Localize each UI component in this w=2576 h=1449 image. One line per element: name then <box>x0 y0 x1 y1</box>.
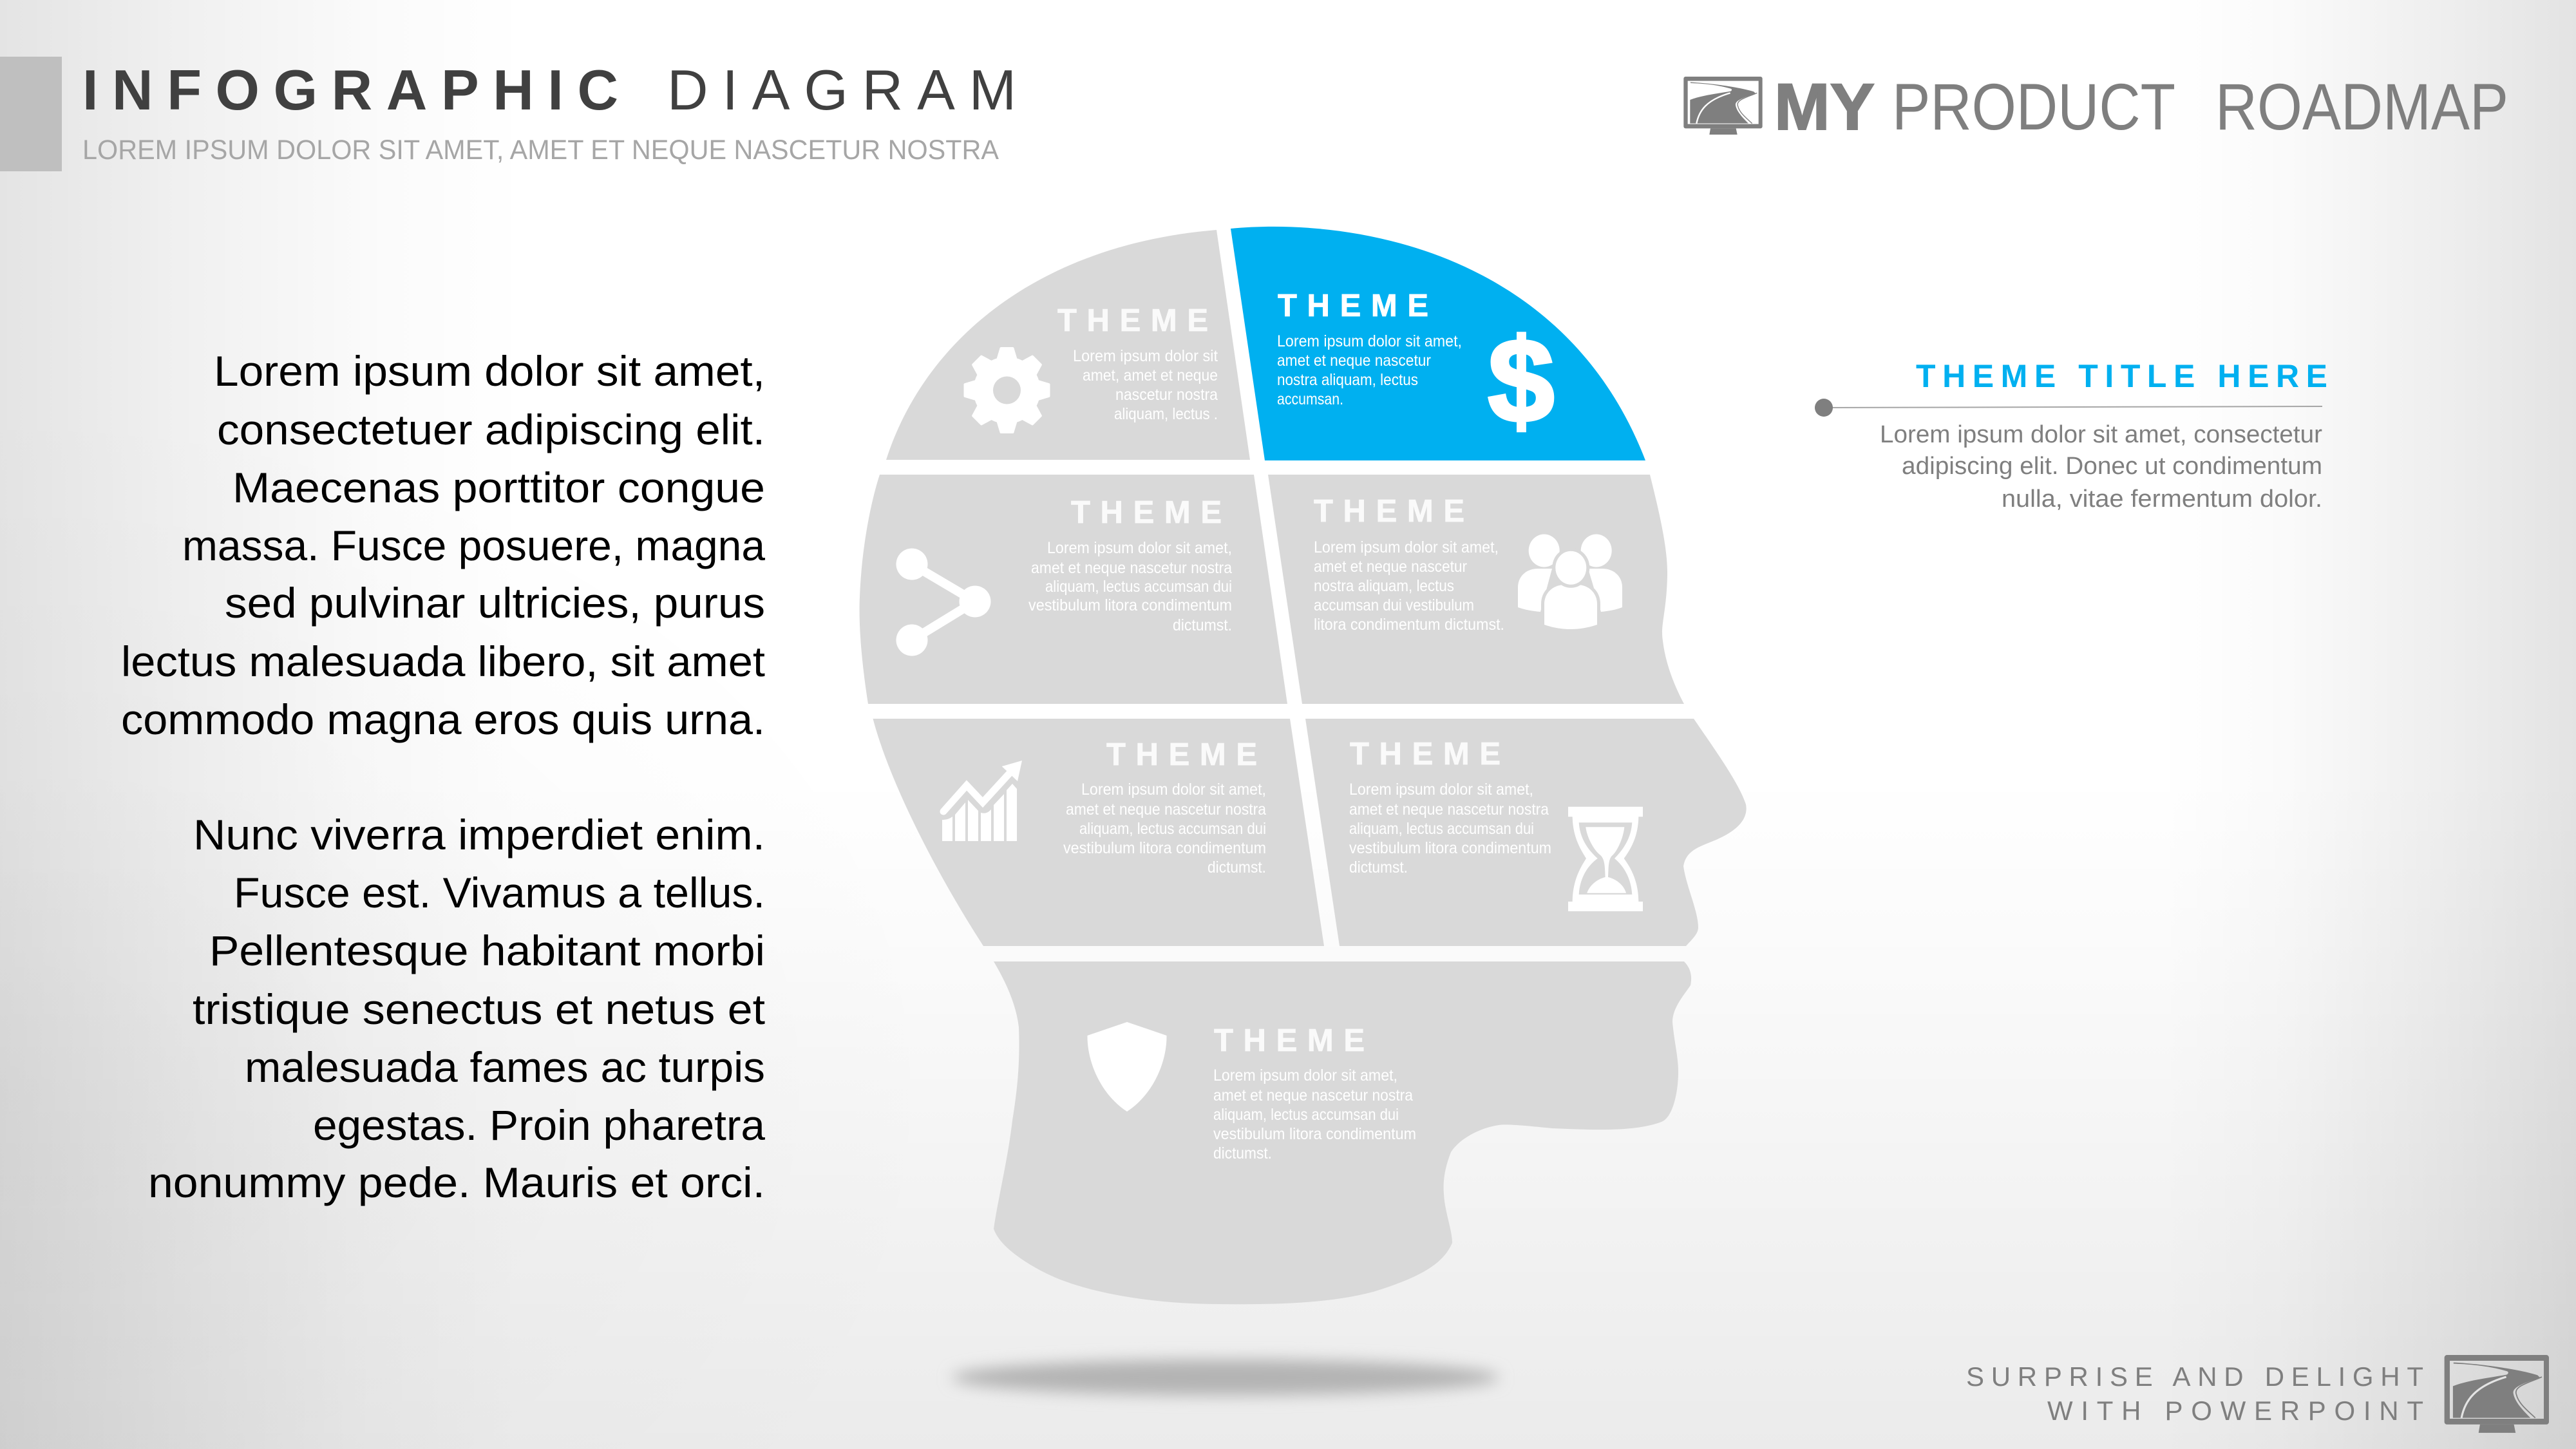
description: accumsan dui vestibulum <box>1314 596 1474 614</box>
description: amet et neque nascetur nostra <box>1213 1086 1413 1104</box>
description: Lorem ipsum dolor sit amet, <box>1314 538 1499 556</box>
description: Lorem ipsum dolor sit amet, <box>1349 781 1533 799</box>
title <box>82 58 1016 122</box>
left body text: lectus malesuada libero, sit amet <box>121 638 765 685</box>
description: dictumst. <box>1173 616 1232 634</box>
title: DIAGRAM <box>667 58 1016 122</box>
description: aliquam, lectus accumsan dui <box>1079 820 1266 838</box>
logo wordmark: PRODUCT <box>1892 70 2175 144</box>
description: amet et neque nascetur <box>1314 558 1467 576</box>
description: dictumst. <box>1208 858 1266 876</box>
heading: THEME <box>1057 303 1208 338</box>
left body text: tristique senectus et netus et <box>193 985 765 1033</box>
description: vestibulum litora condimentum <box>1213 1125 1416 1143</box>
header accent block <box>0 57 62 171</box>
description <box>1277 332 1462 408</box>
callout heading: THEME TITLE HERE <box>1916 358 2327 394</box>
heading: THEME <box>1278 289 1428 323</box>
left body text: egestas. Proin pharetra <box>313 1101 765 1149</box>
icon: shield <box>1087 1022 1167 1112</box>
description: amet et neque nascetur nostra <box>1066 800 1266 819</box>
description: amet et neque nascetur nostra <box>1349 800 1549 819</box>
icon: share <box>896 549 990 656</box>
panel: middle right theme <box>1268 475 1684 704</box>
left body text: consectetuer adipiscing elit. <box>217 406 765 453</box>
description: nostra aliquam, lectus <box>1277 371 1418 389</box>
description: vestibulum litora condimentum <box>1028 596 1232 614</box>
description <box>1073 347 1218 423</box>
description: aliquam, lectus . <box>1114 405 1218 423</box>
left body text: malesuada fames ac turpis <box>245 1043 765 1091</box>
panel: top left theme <box>886 230 1250 460</box>
description: dictumst. <box>1349 858 1408 876</box>
left body text <box>121 347 765 1206</box>
left body text: Maecenas porttitor congue <box>232 464 765 511</box>
panel: lower right theme with face profile <box>1305 719 1747 946</box>
panel: middle left theme <box>860 475 1287 704</box>
logo wordmark <box>1774 70 2508 144</box>
icon: dollar: $ <box>1488 315 1554 448</box>
panel: lower left theme <box>873 719 1324 946</box>
callout connector dot and line <box>1815 399 2322 417</box>
heading: THEME <box>1314 494 1464 529</box>
description: Lorem ipsum dolor sit amet, <box>1213 1066 1397 1084</box>
logo wordmark: MY <box>1774 70 1875 144</box>
heading: THEME <box>1071 495 1222 530</box>
subtitle: LOREM IPSUM DOLOR SIT AMET, AMET ET NEQUE NASCETUR NOSTRA <box>82 135 999 166</box>
description <box>1028 539 1232 634</box>
left body text: Pellentesque habitant morbi <box>209 927 765 974</box>
description: amet et neque nascetur nostra <box>1031 559 1232 577</box>
footer tagline <box>1966 1361 2423 1426</box>
description: nostra aliquam, lectus <box>1314 577 1454 595</box>
left body text: Fusce est. Vivamus a tellus. <box>234 869 765 916</box>
description: Lorem ipsum dolor sit amet, <box>1047 539 1232 557</box>
description <box>1213 1066 1416 1162</box>
description: aliquam, lectus accumsan dui <box>1045 578 1232 596</box>
description <box>1063 781 1266 876</box>
icon: gear <box>965 348 1048 432</box>
heading: THEME <box>1350 737 1501 772</box>
head drop shadow <box>952 1359 1499 1396</box>
heading: THEME <box>1106 737 1257 772</box>
icon: hourglass <box>1568 807 1643 911</box>
icon: growth chart <box>942 761 1022 841</box>
footer tagline: WITH POWERPOINT <box>2047 1396 2423 1426</box>
description: Lorem ipsum dolor sit <box>1073 347 1218 365</box>
panel: top right theme highlighted <box>1231 227 1645 460</box>
description: accumsan. <box>1277 390 1343 408</box>
description: litora condimentum dictumst. <box>1314 616 1504 634</box>
description <box>1314 538 1504 634</box>
left body text: nonummy pede. Mauris et orci. <box>148 1159 765 1206</box>
heading: THEME <box>1214 1023 1365 1058</box>
description: amet, amet et neque <box>1083 366 1218 384</box>
callout description <box>1880 421 2322 513</box>
description: dictumst. <box>1213 1144 1272 1162</box>
description: aliquam, lectus accumsan dui <box>1213 1106 1399 1124</box>
callout description: Lorem ipsum dolor sit amet, consectetur <box>1880 421 2322 448</box>
left body text: Lorem ipsum dolor sit amet, <box>214 347 765 395</box>
description: aliquam, lectus accumsan dui <box>1349 820 1534 838</box>
footer tagline: SURPRISE AND DELIGHT <box>1966 1361 2423 1392</box>
description: nascetur nostra <box>1115 386 1218 404</box>
description: Lorem ipsum dolor sit amet, <box>1277 332 1462 350</box>
description: Lorem ipsum dolor sit amet, <box>1081 781 1266 799</box>
description <box>1349 781 1551 876</box>
left body text: commodo magna eros quis urna. <box>121 696 765 743</box>
logo: monitor with road <box>1683 77 1763 135</box>
description: vestibulum litora condimentum <box>1063 839 1266 857</box>
title: INFOGRAPHIC <box>82 58 618 122</box>
logo wordmark: ROADMAP <box>2215 70 2508 144</box>
callout description: adipiscing elit. Donec ut condimentum <box>1902 453 2322 480</box>
left body text: sed pulvinar ultricies, purus <box>225 579 765 627</box>
callout description: nulla, vitae fermentum dolor. <box>2002 486 2322 513</box>
left body text: massa. Fusce posuere, magna <box>182 522 765 569</box>
callout: theme title <box>1815 358 2327 513</box>
left body text: Nunc viverra imperdiet enim. <box>193 811 765 858</box>
panel: jaw and neck theme <box>994 961 1691 1304</box>
description: amet et neque nascetur <box>1277 352 1431 370</box>
footer logo: monitor with road <box>2445 1355 2549 1433</box>
icon: people <box>1518 535 1622 629</box>
description: vestibulum litora condimentum <box>1349 839 1551 857</box>
